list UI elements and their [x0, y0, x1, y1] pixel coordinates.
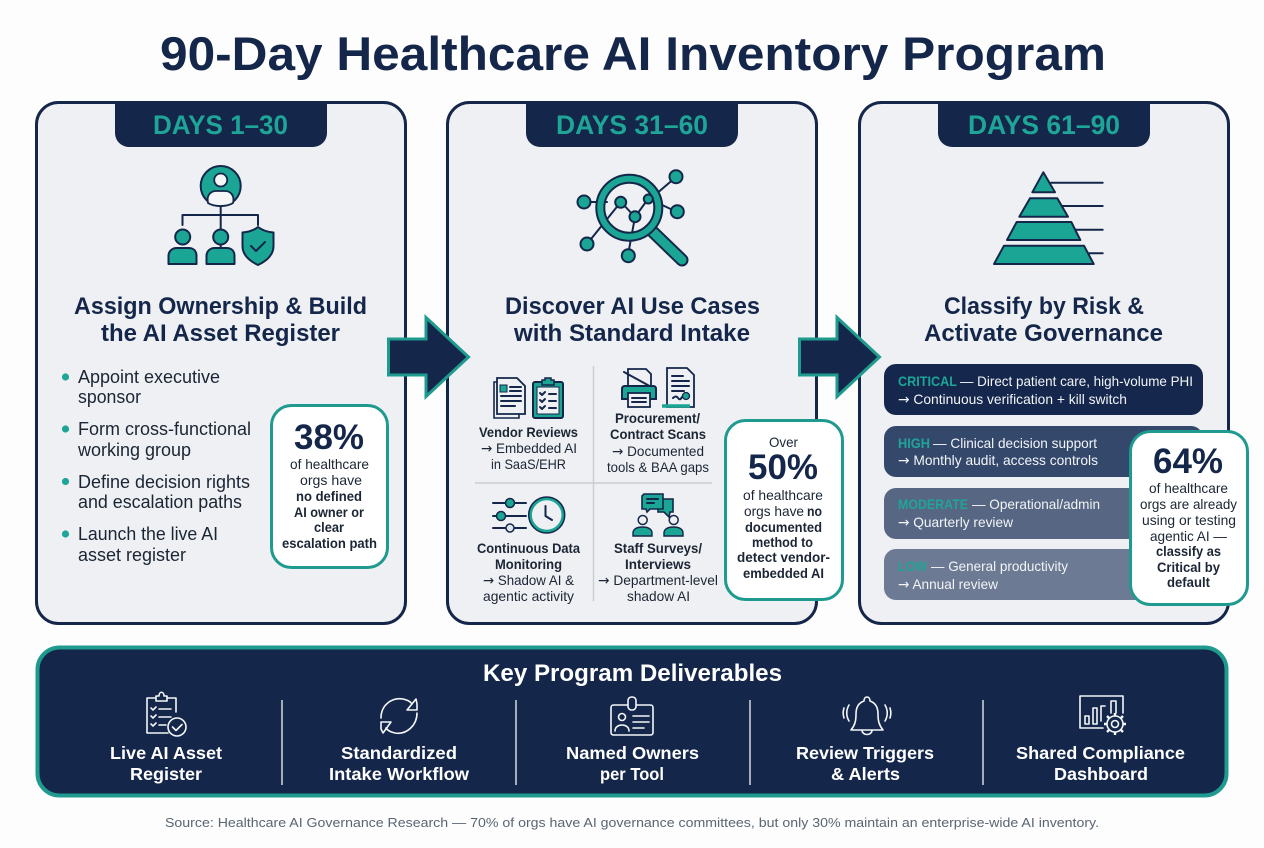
stat callout: 38%: AI owner or: [294, 504, 364, 520]
bullet list: ownership actions: Appoint executive: [78, 367, 220, 387]
stat callout: 64%: [1130, 432, 1248, 604]
icon: bell: [843, 697, 891, 734]
deliverable: standardized intake workflow: Intake Workflow: [329, 764, 469, 784]
risk tier: low: LOW: [898, 558, 928, 574]
risk tier: high: — Clinical decision support: [933, 435, 1097, 451]
stat callout: 38%: no defined: [296, 488, 362, 504]
discovery method: vendor reviews: [479, 378, 578, 472]
deliverable: named owners per tool: per Tool: [600, 764, 664, 784]
discovery method: procurement scans: → Documented: [612, 443, 704, 460]
stat callout: 50%: orgs have: [744, 503, 804, 519]
deliverable: standardized intake workflow: [329, 699, 469, 784]
deliverable: shared compliance dashboard: [1016, 696, 1185, 784]
heading: classify by risk: Classify by Risk &: [944, 293, 1144, 320]
stat callout: 50%: of healthcare: [743, 487, 823, 503]
discovery method: staff surveys: → Department-level: [598, 572, 718, 589]
stat callout: 64%: using or testing: [1142, 512, 1236, 528]
stat callout: 64%: orgs are already: [1140, 496, 1237, 512]
stat callout: 38%: [272, 406, 388, 568]
discovery method: staff surveys: Interviews: [625, 556, 691, 572]
risk tier: low: [884, 549, 1203, 600]
bullet list: ownership actions: [62, 367, 251, 565]
heading: discover use cases: with Standard Intake: [513, 320, 750, 347]
discovery method: continuous monitoring: → Shadow AI &: [483, 572, 575, 589]
heading: assign ownership: the AI Asset Register: [101, 320, 340, 347]
tab: days 61-90: [938, 102, 1150, 147]
stat callout: 38%: 38%: [294, 418, 364, 457]
discovery method: staff surveys: Staff Surveys/: [614, 540, 702, 556]
stat callout: 50%: [726, 420, 842, 600]
heading: classify by risk: [924, 293, 1163, 347]
risk tier: moderate: — Operational/admin: [972, 496, 1100, 512]
icon: risk pyramid: [994, 172, 1103, 264]
discovery method: continuous monitoring: [477, 498, 580, 604]
stat callout: 64%: Critical by: [1157, 559, 1220, 575]
tab: days 1-30: DAYS 1–30: [153, 110, 288, 140]
heading: key program deliverables: Key Program Deliverables: [483, 660, 782, 687]
bullet list: ownership actions: and escalation paths: [78, 492, 242, 512]
discovery method: continuous monitoring: Monitoring: [495, 556, 562, 572]
discovery method: staff surveys: shadow AI: [627, 588, 690, 604]
discovery method: procurement scans: Contract Scans: [610, 426, 706, 442]
stat callout: 64%: of healthcare: [1149, 480, 1228, 496]
risk tier: critical: [884, 364, 1203, 415]
stat callout: 38%: orgs have: [300, 472, 362, 488]
bullet list: ownership actions: working group: [77, 440, 191, 460]
discovery method: procurement scans: [607, 368, 709, 475]
risk tier: critical: → Continuous verification + kill switch: [898, 391, 1127, 408]
stat callout: 50%: Over: [769, 434, 798, 450]
deliverable: review triggers and alerts: [796, 697, 934, 784]
stat callout: 50%: detect vendor-: [737, 549, 830, 565]
risk tier: moderate: MODERATE: [898, 496, 968, 512]
icon: printer and contract: [622, 368, 694, 407]
heading: assign ownership: Assign Ownership & Build: [74, 293, 367, 320]
deliverable: shared compliance dashboard: Dashboard: [1054, 764, 1148, 784]
discovery method: continuous monitoring: Continuous Data: [477, 540, 580, 556]
risk tier: critical: — Direct patient care, high-volume PHI: [960, 373, 1193, 389]
stat callout: 38%: clear: [314, 519, 344, 535]
stat callout: 50%: embedded AI: [743, 565, 824, 581]
panel: key program deliverables: [38, 648, 1226, 796]
risk tier: critical: CRITICAL: [898, 373, 957, 389]
heading: assign ownership: [74, 293, 367, 347]
deliverable: live AI asset register: Register: [130, 764, 202, 784]
bullet list: ownership actions: sponsor: [78, 387, 141, 407]
tab: days 31-60: [526, 102, 738, 147]
stat callout: 50%: no: [807, 503, 822, 519]
heading: classify by risk: Activate Governance: [924, 320, 1163, 347]
icon: org chart with shield: [168, 166, 274, 265]
icon: magnifier over network: [578, 170, 684, 262]
stat callout: 50%: 50%: [748, 448, 818, 487]
risk tier: high: → Monthly audit, access controls: [898, 452, 1098, 469]
discovery method: continuous monitoring: agentic activity: [483, 588, 574, 604]
risk tier: low: → Annual review: [898, 576, 999, 593]
risk tier: moderate: [884, 488, 1203, 539]
deliverable: live AI asset register: [110, 692, 222, 784]
deliverable: standardized intake workflow: Standardized: [341, 743, 457, 763]
icon: documents and checklist: [494, 378, 563, 418]
icon: refresh arrows: [381, 699, 417, 733]
icon: people in conversation: [633, 494, 683, 536]
stat callout: 50%: method to: [752, 534, 813, 550]
bullet list: ownership actions: Form cross-functional: [78, 419, 251, 439]
stat callout: 64%: agentic AI —: [1150, 528, 1227, 544]
heading: discover use cases: [505, 293, 760, 347]
deliverable: shared compliance dashboard: Shared Compliance: [1016, 743, 1185, 763]
panel: days 1-30: [36, 102, 406, 624]
bullet list: ownership actions: Launch the live AI: [78, 524, 218, 544]
risk tier: high: [884, 426, 1203, 477]
deliverable: review triggers and alerts: Review Triggers: [796, 743, 934, 763]
icon: clipboard with check: [147, 692, 186, 736]
tab: days 61-90: DAYS 61–90: [968, 110, 1120, 140]
risk tier: moderate: → Quarterly review: [898, 514, 1014, 531]
stat callout: 38%: escalation path: [282, 535, 377, 551]
icon: sliders and clock: [493, 498, 564, 532]
deliverable: live AI asset register: Live AI Asset: [110, 743, 222, 763]
icon: ID badge: [611, 697, 653, 735]
stat callout: 64%: classify as: [1156, 543, 1221, 559]
discovery method: vendor reviews: Vendor Reviews: [479, 424, 578, 440]
discovery method: vendor reviews: → Embedded AI: [481, 440, 577, 457]
arrow: days 31-60 to days 61-90: [800, 318, 880, 396]
source note: Source: Healthcare AI Governance Research — 70% of orgs have AI governance committees, but only 30% maintain an enterprise-wide AI inventory.: [165, 815, 1099, 830]
title: 90-Day Healthcare AI Inventory Program: [160, 27, 1106, 80]
arrow: days 1-30 to days 31-60: [388, 318, 468, 396]
bullet list: ownership actions: Define decision rights: [78, 472, 250, 492]
discovery method: procurement scans: Procurement/: [615, 410, 700, 426]
discovery method: procurement scans: tools & BAA gaps: [607, 459, 709, 475]
panel: days 31-60: [448, 102, 842, 624]
discovery method: staff surveys: [598, 494, 718, 604]
deliverable: review triggers and alerts: & Alerts: [831, 764, 900, 784]
stat callout: 64%: default: [1167, 574, 1210, 590]
stat callout: 64%: 64%: [1153, 442, 1223, 481]
discovery method: vendor reviews: in SaaS/EHR: [491, 456, 566, 472]
icon: dashboard with gear: [1080, 696, 1126, 735]
tab: days 31-60: DAYS 31–60: [556, 110, 708, 140]
deliverable: named owners per tool: [566, 697, 699, 784]
panel: days 61-90: [860, 102, 1248, 624]
risk tier: high: HIGH: [898, 435, 930, 451]
bullet list: ownership actions: asset register: [78, 545, 186, 565]
risk tier: low: — General productivity: [931, 558, 1068, 574]
stat callout: 50%: documented: [745, 519, 822, 535]
stat callout: 38%: of healthcare: [290, 456, 369, 472]
tab: days 1-30: [115, 102, 327, 147]
deliverable: named owners per tool: Named Owners: [566, 743, 699, 763]
heading: discover use cases: Discover AI Use Cases: [505, 293, 760, 320]
